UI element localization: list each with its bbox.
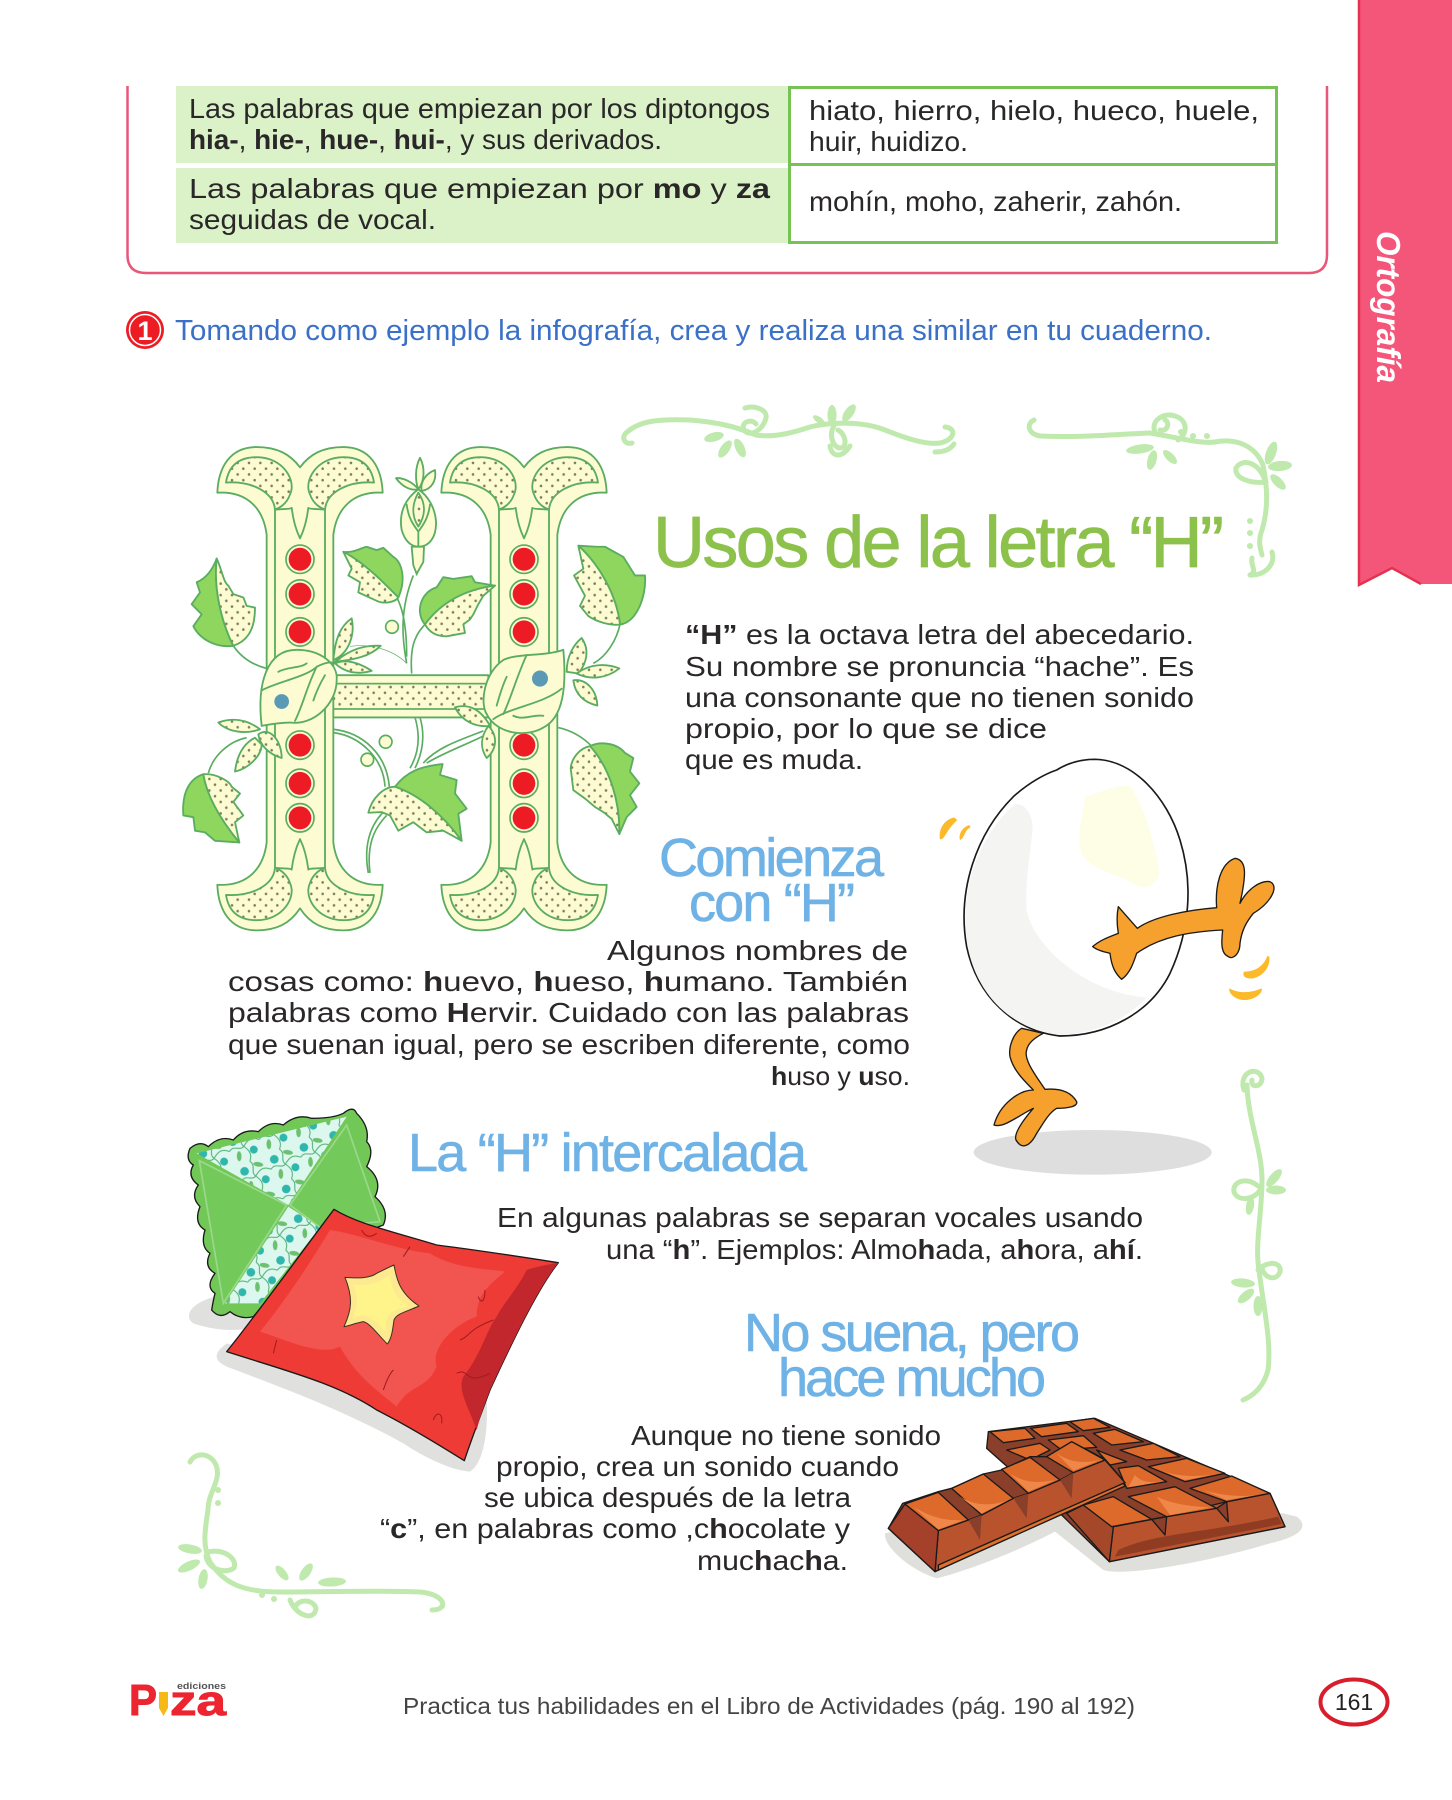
left rose bud (260, 650, 337, 726)
back green pillow (188, 1109, 385, 1330)
scalloped pillow body (188, 1109, 385, 1318)
star (344, 1265, 419, 1344)
paragraph: No suena, pero hace mucho: Aunque no tiene sonido (631, 1420, 941, 1451)
right flap (290, 1125, 380, 1227)
front chocolate bar (888, 1442, 1125, 1572)
paragraph: No suena, pero hace mucho: propio, crea un sonido cuando (496, 1451, 899, 1482)
stems behind (208, 548, 620, 873)
table left cells (176, 86, 788, 243)
small sepal leaves (218, 618, 619, 772)
motion marks (940, 817, 1269, 1000)
table right cells (790, 88, 1276, 242)
paragraph: La H intercalada (497, 1202, 1143, 1265)
intro paragraph: Su nombre se pronuncia “hache”. Es (685, 651, 1194, 682)
row 2 rule second line: seguidas de vocal. (189, 204, 436, 235)
activity number badge: 1 (137, 316, 153, 346)
heading: La H intercalada: La “H” intercalada (408, 1123, 808, 1183)
footer note: Practica tus habilidades en el Libro de Actividades (pág. 190 al 192) (403, 1693, 1135, 1719)
publisher logo: ediciones (177, 1681, 226, 1691)
paragraph: Comienza con H: huso y uso. (771, 1061, 910, 1091)
heading: Comienza con H: con “H” (689, 873, 855, 933)
heading: Comienza con H: Comienza (659, 828, 885, 888)
page number: 161 (1335, 1689, 1373, 1715)
star inner light (353, 1275, 408, 1332)
paragraph: Comienza con H: cosas como: huevo, hueso, humano. También (228, 966, 908, 997)
row 1 examples: hiato, hierro, hielo, hueco, huele, (809, 95, 1259, 126)
paragraph: Comienza con H: palabras como Hervir. Cuidado con las palabras (228, 997, 909, 1028)
egg leg (994, 1028, 1077, 1146)
paragraph: Comienza con H: Algunos nombres de (607, 935, 908, 966)
chocolate shadow (885, 1500, 1302, 1578)
row 2 rule: Las palabras que empiezan por mo y za (189, 173, 770, 204)
paragraph: Comienza con H (228, 935, 910, 1091)
heading: No suena, pero hace mucho: hace mucho (778, 1348, 1046, 1408)
egg character (940, 759, 1274, 1175)
pillow dark side (462, 1263, 558, 1430)
ornament: top right corner flourish (1029, 415, 1292, 575)
pencil i (159, 1692, 168, 1716)
egg body (964, 759, 1188, 1036)
paragraph: La H intercalada: una “h”. Ejemplos: Almo hada, ahora, ahí. (606, 1234, 1143, 1265)
pillow creases (273, 1230, 493, 1423)
pink side tab (1359, 0, 1452, 585)
paragraph: No suena, pero hace mucho: se ubica después de la letra (484, 1482, 851, 1513)
egg arm (1093, 858, 1274, 979)
patterned fabric bottom (225, 1207, 320, 1303)
publisher logo: P (129, 1676, 157, 1725)
ornament: top centre flourish (624, 402, 954, 460)
back chocolate bar (987, 1418, 1285, 1562)
paragraph: No suena, pero hace mucho (380, 1420, 941, 1576)
intro paragraph: propio, por lo que se dice (685, 713, 1047, 744)
chocolate bars (885, 1418, 1302, 1578)
activity number badge (126, 311, 164, 349)
patterned fabric top (197, 1117, 347, 1205)
pillow light area (260, 1230, 505, 1407)
heading: No suena, pero hace mucho (744, 1303, 1080, 1408)
tab label: Ortografía (1370, 231, 1407, 383)
heading: Comienza con H (659, 828, 885, 933)
right rose bud (484, 650, 564, 733)
egg shading (965, 804, 1147, 1035)
left stem (217, 447, 383, 930)
green pillow shadow (189, 1297, 257, 1330)
row 2 examples: mohín, moho, zaherir, zahón. (809, 186, 1182, 217)
ornament: bottom left corner flourish (176, 1455, 443, 1616)
crossbar (332, 675, 488, 717)
right stem (441, 447, 607, 930)
ornament: right vertical vine (1231, 1071, 1286, 1400)
intro paragraph: que es muda. (685, 744, 863, 775)
main title: Usos de la letra “H” (653, 503, 1224, 583)
red pillow body (227, 1209, 558, 1461)
top bud (396, 458, 436, 574)
egg shadow (974, 1130, 1212, 1175)
paragraph: No suena, pero hace mucho: muchacha. (697, 1545, 848, 1576)
row 1 examples second line: huir, huidizo. (809, 126, 968, 157)
activity instruction: Tomando como ejemplo la infografía, crea y realiza una similar en tu cuaderno. (175, 315, 1212, 347)
red pillow shadow (217, 1343, 487, 1472)
paragraph: Comienza con H: que suenan igual, pero se escriben diferente, como (228, 1029, 910, 1060)
rules table panel (128, 86, 1327, 273)
row 1 rule: Las palabras que empiezan por los diptongos (189, 93, 770, 124)
paragraph: La H intercalada: En algunas palabras se separan vocales usando (497, 1202, 1143, 1233)
intro paragraph: “H” es la octava letra del abecedario. (685, 619, 1194, 650)
publisher logo (129, 1676, 227, 1725)
left flap (199, 1161, 287, 1303)
heading: No suena, pero hace mucho: No suena, pero (744, 1303, 1080, 1363)
illustrated letter H (183, 447, 645, 930)
small bubbles (361, 620, 398, 766)
intro paragraph (685, 619, 1194, 775)
egg highlight (1079, 786, 1159, 887)
large leaves (183, 546, 645, 842)
page number (1320, 1680, 1388, 1724)
paragraph: No suena, pero hace mucho: “c”, en palabras como ,c hocolate y (380, 1513, 850, 1544)
front red pillow (217, 1209, 558, 1472)
intro paragraph: una consonante que no tienen sonido (685, 682, 1194, 713)
publisher logo: za (170, 1677, 227, 1724)
row 1 rule second line: hia-, hie-, hue-, hui-, y sus derivados. (189, 124, 662, 155)
